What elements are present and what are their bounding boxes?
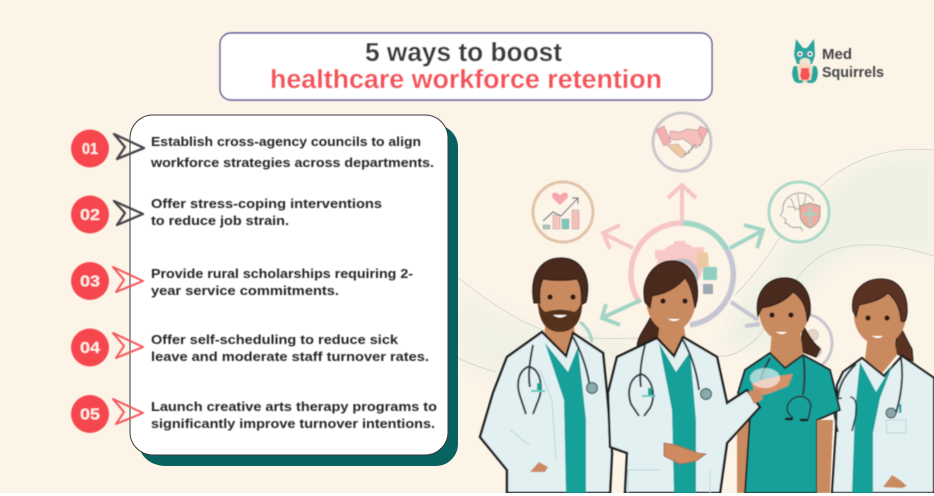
text 04	[151, 332, 429, 364]
text 03: Provide rural scholarships requiring 2-	[151, 266, 413, 281]
arrow 01	[114, 134, 144, 159]
icon: squirrel mascot	[792, 39, 818, 83]
arrow: up	[668, 185, 696, 222]
person 1: male doctor, far left	[480, 258, 612, 493]
title box	[220, 33, 712, 100]
card body	[130, 115, 448, 455]
text 01	[150, 134, 434, 170]
number badge 04: 04	[80, 340, 100, 357]
logo wordmark: Squirrels	[822, 65, 884, 81]
icon: brain with shield	[769, 182, 829, 242]
title line 1: 5 ways to boost	[365, 39, 563, 67]
card shadow	[140, 125, 458, 466]
number badge 02: 02	[80, 207, 100, 224]
text 02: Offer stress-coping interventions	[151, 196, 382, 211]
number badge 02	[71, 196, 109, 234]
item 03	[71, 262, 413, 300]
number badge 01: 01	[82, 141, 98, 158]
number badge 03	[71, 262, 109, 300]
number badge 03: 03	[80, 274, 100, 290]
text 02: to reduce job strain.	[151, 213, 289, 228]
arrow 03	[113, 267, 143, 292]
text 01: Establish cross-agency councils to align	[151, 134, 421, 149]
logo wordmark: Med	[822, 47, 852, 63]
text 02	[151, 196, 382, 228]
icon: handshake	[653, 113, 711, 171]
item 01	[71, 130, 434, 170]
text 03: year service commitments.	[151, 283, 339, 298]
arrow: lower right	[731, 302, 760, 326]
person 2: female doctor, centre	[608, 261, 763, 493]
person 3: female nurse in scrubs	[737, 278, 840, 493]
panel: list card	[130, 115, 458, 466]
icon: gear	[655, 241, 717, 294]
person 4: female doctor, far right	[832, 279, 934, 493]
logo: Med Squirrels	[792, 39, 884, 83]
arrow 04	[113, 333, 143, 358]
text 01: workforce strategies across departments.	[150, 155, 434, 170]
text 05	[151, 399, 437, 431]
text 04: leave and moderate staff turnover rates.	[151, 349, 429, 364]
arrow: lower left	[602, 300, 641, 325]
title line 2: healthcare workforce retention	[270, 66, 662, 94]
arrow 02	[114, 201, 143, 225]
text 05: significantly improve turnover intentions.	[151, 416, 435, 431]
hub diagram	[533, 113, 832, 372]
item 02	[71, 196, 382, 234]
number badge 01	[71, 130, 109, 168]
text 04: Offer self-scheduling to reduce sick	[151, 332, 399, 347]
icon: growth chart with heart	[533, 182, 593, 242]
arrow: upper left	[603, 225, 633, 249]
icon: people, lower right	[774, 314, 832, 372]
item 04	[71, 328, 429, 366]
item 05	[71, 395, 437, 433]
number badge 04	[71, 328, 109, 366]
text 05: Launch creative arts therapy programs to	[151, 399, 437, 414]
arrow 05	[113, 399, 143, 424]
number badge 05: 05	[80, 406, 100, 424]
arrow: upper right	[730, 225, 763, 248]
text 03	[151, 266, 413, 298]
logo wordmark	[822, 47, 884, 81]
background ribbons	[458, 149, 934, 400]
icon: ring, lower left	[580, 322, 592, 342]
illustration: four healthcare workers	[480, 258, 934, 493]
hub ring	[631, 223, 733, 325]
number badge 05	[71, 395, 109, 433]
